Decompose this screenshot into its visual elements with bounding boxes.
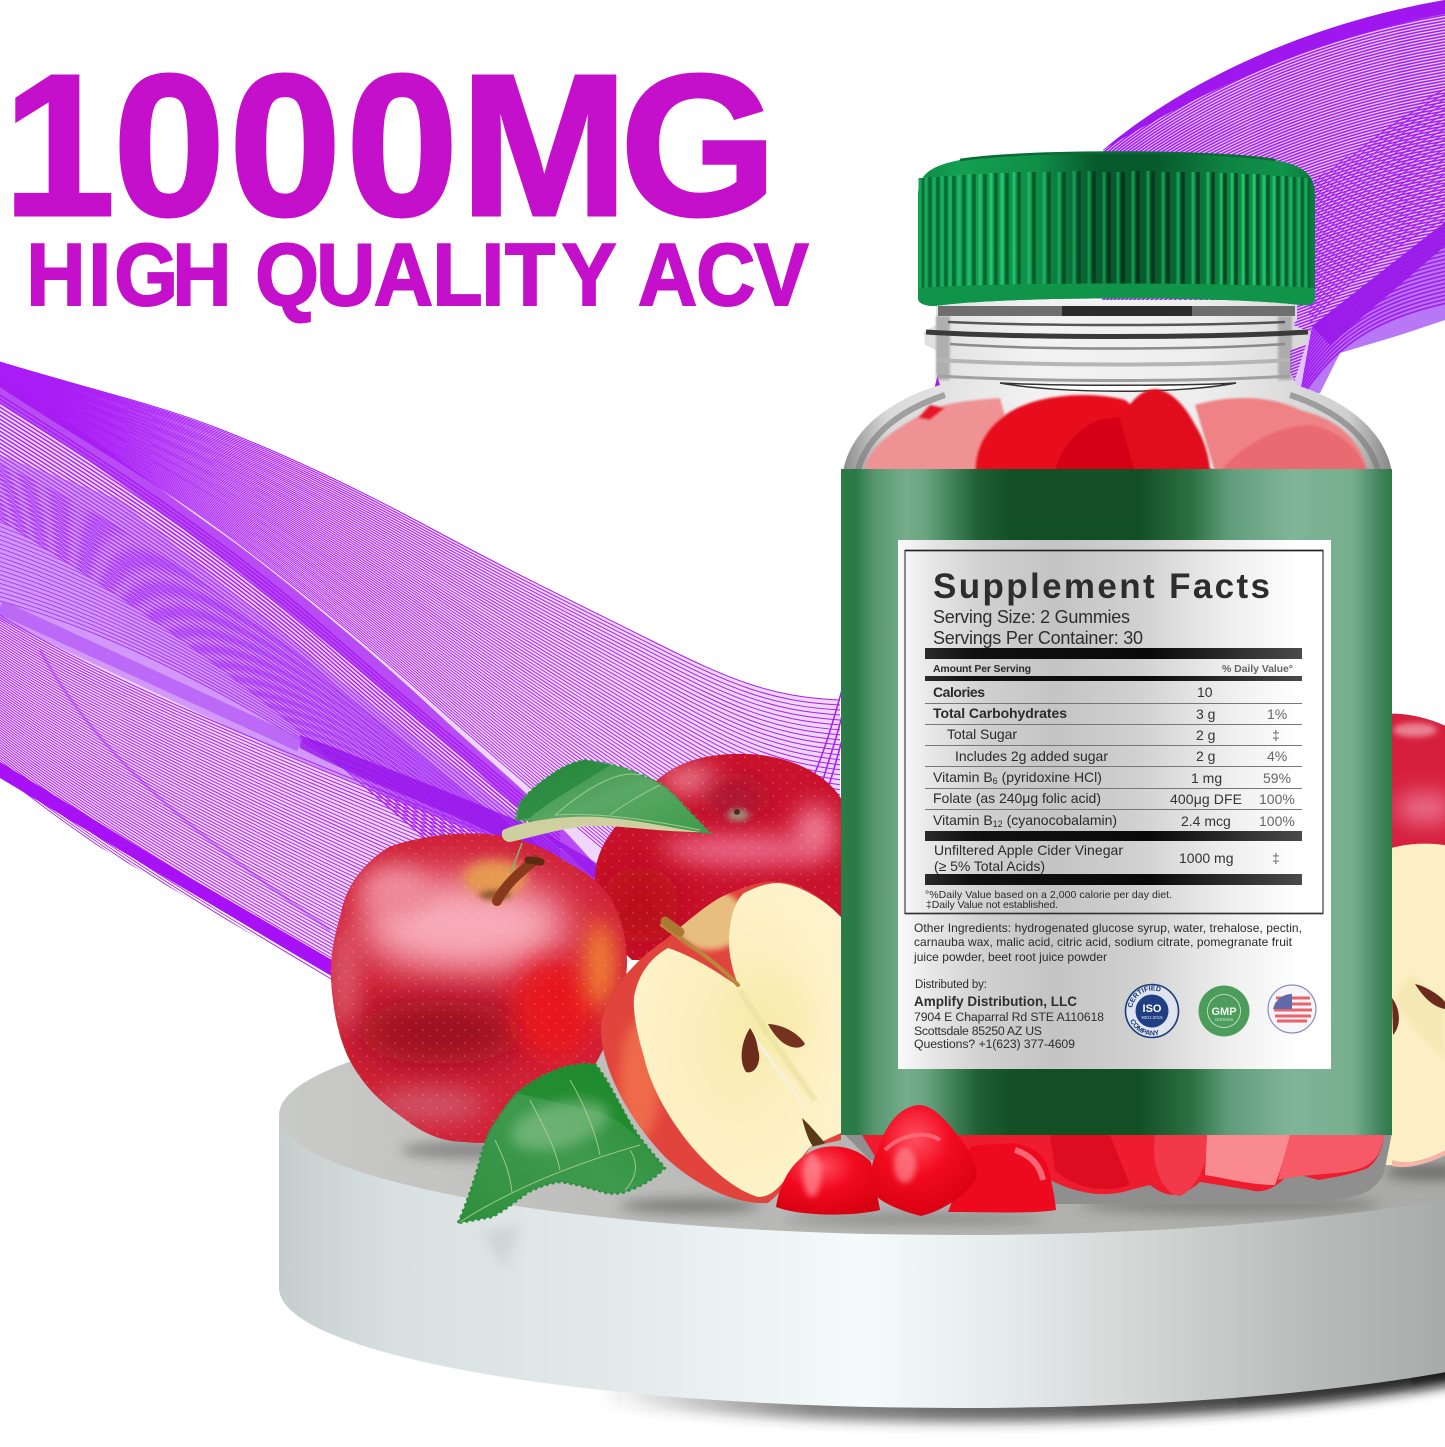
row: apple cider vinegar: ‡ [1272, 850, 1280, 866]
row: added sugar: 2 g [1196, 748, 1215, 764]
row: total sugar: ‡ [1272, 727, 1280, 743]
headline: 1000MG: 1000MG [3, 32, 777, 258]
distributor details: Distributed by: [915, 979, 987, 991]
row: vitamin B6: (pyridoxine HCl) [998, 769, 1102, 785]
row: folate: 400μg DFE [1170, 791, 1242, 807]
other ingredients: juice powder, beet root juice powder [913, 950, 1107, 964]
leaf: upper leaf with stalk [502, 760, 710, 842]
row: vitamin B12: Vitamin B [933, 812, 993, 828]
badge: ISO certified: CERTIFIED [1128, 986, 1161, 1008]
row: calories: 10 [1197, 684, 1213, 700]
serving information [933, 607, 1143, 648]
row: vitamin B6 [933, 769, 1291, 786]
other ingredients: carnauba wax, malic acid, citric acid, sodium citrate, pomegranate fruit [914, 935, 1293, 949]
row: apple cider vinegar [934, 842, 1280, 874]
row: total carbohydrates: Total Carbohydrates [933, 705, 1067, 721]
row: apple cider vinegar: Unfiltered Apple Cider Vinegar [934, 842, 1123, 858]
bottle glass: neck and shoulders [843, 300, 1392, 472]
row: folate [933, 790, 1295, 807]
footnotes [925, 889, 1172, 911]
platform: podium disc [279, 1050, 1445, 1432]
leaf: lower leaf [458, 1064, 665, 1223]
badge: ISO certified [1124, 984, 1180, 1038]
table header with bars: Amount Per Serving [933, 663, 1031, 675]
apple: big whole apple [325, 825, 635, 1150]
row: vitamin B6: 1 mg [1191, 770, 1222, 786]
distributor details: 7904 E Chaparral Rd STE A110618 [914, 1010, 1104, 1024]
badge: ISO certified: ISO [1143, 1003, 1162, 1015]
row: vitamin B6: Vitamin B [933, 769, 993, 785]
row: vitamin B12 [933, 812, 1295, 829]
row: total carbohydrates [933, 705, 1287, 722]
gummies in foreground [776, 1105, 1056, 1216]
apple: cut apple half [595, 875, 845, 1210]
badge: GMP certified: CERTIFIED [1215, 1018, 1234, 1022]
bottle glass: base with gummies [843, 1133, 1392, 1204]
row: apple cider vinegar: 1000 mg [1179, 850, 1233, 866]
row: folate: 100% [1259, 791, 1295, 807]
badge: USA flag [1268, 985, 1316, 1033]
table header with bars [925, 648, 1302, 681]
bottle [841, 151, 1392, 1204]
apple: back red apple [590, 750, 845, 965]
row: vitamin B6: 6 [993, 776, 998, 786]
gummy: dome [776, 1146, 880, 1215]
table header with bars: % Daily Value° [1222, 663, 1293, 675]
row: calories: Calories [933, 684, 985, 700]
badge: ISO certified: COMPANY [1130, 1019, 1158, 1036]
panel title: Supplement Facts [933, 567, 1270, 606]
badge: GMP certified [1198, 986, 1250, 1036]
row: vitamin B12: (cyanocobalamin) [1003, 812, 1117, 828]
gummy: right [948, 1143, 1056, 1212]
row: total sugar [947, 726, 1280, 743]
row: added sugar: 4% [1267, 748, 1287, 764]
gummy: heart centre [871, 1105, 977, 1216]
other ingredients [913, 921, 1302, 964]
row: apple cider vinegar: (≥ 5% Total Acids) [934, 858, 1045, 874]
bottle cap [918, 152, 1315, 306]
row: vitamin B6: 59% [1263, 770, 1291, 786]
bottle label band [841, 469, 1392, 1135]
badge: ISO certified: 9001:2015 [1141, 1015, 1163, 1020]
distributor details: Questions? +1(623) 377-4609 [914, 1037, 1075, 1051]
ribbon: large wave on left [0, 362, 841, 980]
row: total sugar: 2 g [1196, 727, 1215, 743]
row: vitamin B12: 12 [993, 819, 1003, 829]
serving information: Servings Per Container: 30 [933, 628, 1143, 648]
footnotes: ‡Daily Value not established. [926, 899, 1058, 911]
row: total sugar: Total Sugar [947, 726, 1017, 742]
headline: high quality ACV: HIGH QUALITY ACV [26, 226, 809, 325]
row: calories [933, 684, 1213, 700]
serving information: Serving Size: 2 Gummies [933, 607, 1130, 627]
row: vitamin B12: 100% [1259, 813, 1295, 829]
other ingredients: Other Ingredients: hydrogenated glucose syrup, water, trehalose, pectin, [914, 921, 1302, 935]
row: added sugar [955, 748, 1287, 764]
distributor details: Amplify Distribution, LLC [914, 994, 1077, 1009]
supplement facts panel [898, 540, 1331, 1069]
distributor details: Scottsdale 85250 AZ US [914, 1024, 1042, 1038]
badge: GMP certified: GMP [1211, 1006, 1237, 1018]
footnotes: °%Daily Value based on a 2,000 calorie per day diet. [925, 889, 1172, 901]
apple behind bottle at right edge [1385, 714, 1445, 1167]
row: folate: Folate (as 240μg folic acid) [933, 790, 1101, 806]
row: total carbohydrates: 3 g [1196, 706, 1215, 722]
row: vitamin B12: 2.4 mcg [1181, 813, 1231, 829]
row: total carbohydrates: 1% [1267, 706, 1287, 722]
distributor details [914, 979, 1104, 1051]
ribbon: upper right behind bottle [934, 0, 1445, 531]
gummies visible above label [864, 389, 1368, 472]
row: added sugar: Includes 2g added sugar [955, 748, 1108, 764]
